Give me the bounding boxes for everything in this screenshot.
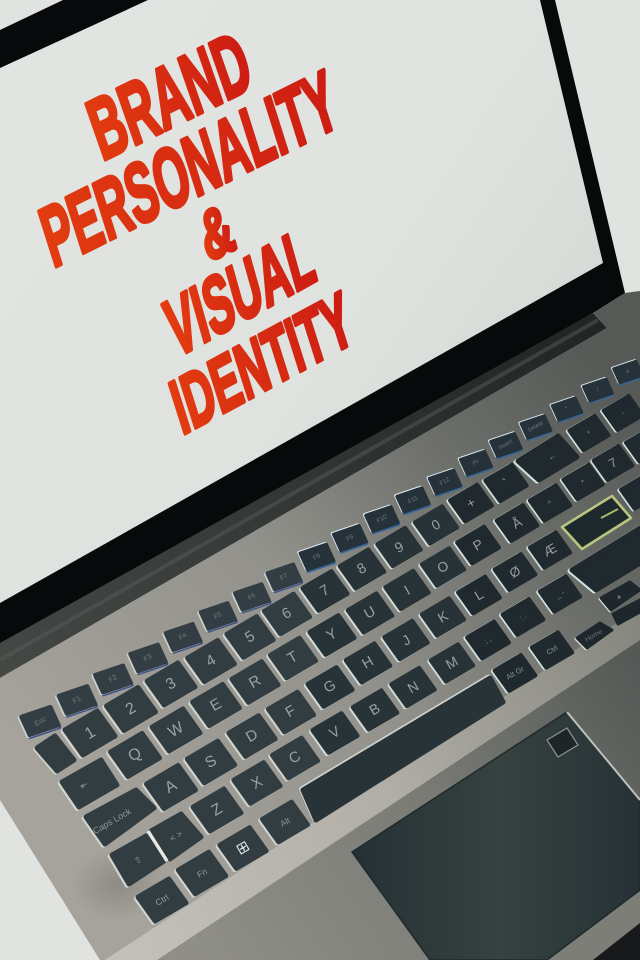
QWERTY key row: 7 — [606, 455, 620, 471]
lower letter key row: : . — [518, 612, 528, 622]
function key row: F5 — [213, 611, 223, 621]
heading: IDENTITY: IDENTITY — [162, 276, 362, 451]
QWERTY key row: E — [207, 695, 225, 715]
home key row: Æ — [541, 540, 559, 560]
number key row: 2 — [123, 699, 139, 719]
QWERTY key row: Q — [125, 745, 145, 765]
bottom key row: Ctrl — [154, 892, 170, 908]
lower letter key row — [110, 525, 640, 885]
lower letter key row: ⇧ — [132, 854, 144, 866]
heading: ampersand: & — [192, 189, 242, 276]
deck bottom edge — [547, 890, 640, 960]
home key row: F — [283, 703, 299, 721]
bottom key row: Ctrl — [545, 643, 560, 657]
function key row: F1 — [71, 694, 83, 706]
function key row: Esc — [32, 714, 48, 728]
number key row: * — [586, 428, 593, 438]
home key row: J — [399, 631, 413, 649]
home key row: K — [435, 608, 451, 626]
number key row: 5 — [242, 628, 258, 646]
bottom key row: Alt — [278, 815, 292, 829]
QWERTY key row: P — [470, 536, 486, 554]
home key row — [84, 475, 640, 845]
laptop screen — [0, 0, 603, 603]
function key row: o — [625, 369, 631, 375]
enter key highlighted green — [562, 496, 631, 549]
bottom key row: Home — [584, 628, 604, 644]
function key row: F11 — [407, 494, 420, 506]
laptop lid bezel — [0, 0, 625, 650]
number key row: 3 — [163, 674, 179, 694]
lower letter key row: < > — [168, 828, 184, 844]
function key row: F7 — [279, 572, 289, 582]
function key row: F2 — [108, 674, 118, 684]
home key row: D — [243, 726, 261, 746]
number key row: 9 — [392, 538, 407, 556]
QWERTY key row: ^ — [546, 498, 554, 508]
home key row: S — [202, 752, 220, 772]
number key row: 6 — [279, 605, 295, 623]
lower letter key row: M — [443, 654, 461, 672]
function key row: F9 — [345, 533, 355, 543]
number key row: 4 — [203, 651, 219, 670]
number key row: 7 — [317, 582, 333, 600]
home key row: A — [162, 777, 180, 797]
light band below keyboard — [105, 608, 640, 960]
function key row: Delete — [527, 420, 545, 434]
bottom key row: Fn — [195, 866, 209, 880]
icon: windows key — [218, 828, 266, 870]
QWERTY key row: T — [285, 649, 301, 667]
heading: VISUAL: VISUAL — [157, 210, 323, 374]
home key row: Caps Lock — [91, 806, 133, 836]
palm rest lower area — [157, 640, 640, 960]
QWERTY key row: ⇤ — [78, 779, 90, 791]
trackpad — [352, 712, 640, 960]
QWERTY key row — [60, 428, 640, 808]
QWERTY key row: Å — [509, 514, 525, 532]
bottom key row: Alt Gr — [504, 664, 526, 682]
icon: windows key: ⊞ — [233, 837, 253, 859]
hinge strip — [0, 313, 607, 678]
home key row: H — [359, 653, 377, 673]
function key row: F3 — [143, 653, 153, 663]
QWERTY key row: W — [165, 719, 187, 741]
lower letter key row: X — [248, 773, 266, 793]
bottom key row — [136, 582, 640, 922]
QWERTY key row: U — [361, 603, 379, 623]
QWERTY key row: O — [435, 558, 452, 576]
home key row: Ø — [507, 563, 523, 581]
lower letter key row: _ - — [553, 588, 566, 601]
function key row: Insert — [498, 439, 514, 451]
function key row: F12 — [439, 476, 452, 487]
lower letter key row: ; , — [483, 635, 493, 645]
QWERTY key row: * — [580, 477, 587, 487]
laptop deck — [0, 291, 640, 960]
lower letter key row: B — [367, 701, 383, 719]
function key row: F4 — [178, 632, 188, 642]
number key row: + — [464, 494, 478, 511]
lower letter key row: V — [327, 723, 343, 742]
number key row: ` — [500, 475, 512, 491]
number key row: 1 — [82, 723, 98, 743]
number key row: - — [620, 409, 627, 417]
lower letter key row: Z — [209, 800, 226, 820]
QWERTY key row: Y — [324, 625, 340, 644]
lower letter key row: N — [405, 678, 421, 696]
number key row: 8 — [355, 560, 369, 578]
bottom key row: ▲ — [614, 592, 624, 602]
keyboard — [20, 361, 640, 922]
function key row: / — [596, 387, 601, 393]
function key row: F6 — [247, 592, 257, 602]
function key row: F8 — [312, 552, 322, 562]
home key row: G — [321, 677, 339, 697]
space bar — [302, 677, 503, 820]
number key row — [36, 396, 640, 772]
function key row: Pr — [472, 459, 480, 467]
lower letter key row: C — [286, 748, 304, 768]
icon: fingerprint sensor — [547, 728, 578, 757]
function key row: * — [565, 405, 570, 412]
deck shading patch — [70, 849, 166, 921]
QWERTY key row: I — [401, 582, 413, 598]
number key row: 0 — [429, 516, 443, 533]
QWERTY key row: R — [246, 672, 264, 692]
home key row: L — [472, 586, 486, 603]
function key row — [20, 361, 640, 737]
function key row: F10 — [376, 513, 389, 525]
number key row: ← — [546, 449, 558, 463]
